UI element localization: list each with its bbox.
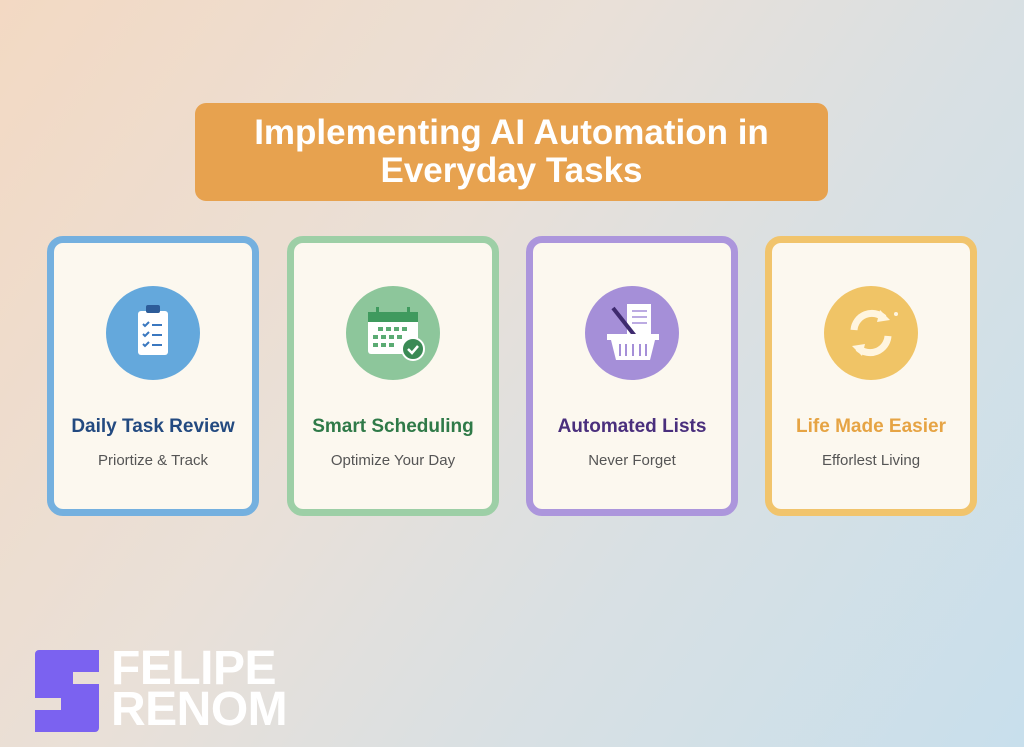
card: daily task review bbox=[47, 236, 259, 516]
icon: calendar bbox=[346, 286, 440, 380]
title bbox=[195, 103, 828, 201]
subtitle: Efforlest Living bbox=[822, 452, 920, 469]
title: Everyday Tasks bbox=[380, 151, 643, 190]
card: life made easier bbox=[765, 236, 977, 516]
icon: refresh bbox=[824, 286, 918, 380]
logo text: RENOM bbox=[111, 683, 287, 736]
heading: Daily Task Review bbox=[71, 416, 235, 437]
card: automated lists bbox=[526, 236, 738, 516]
logo text bbox=[111, 642, 287, 736]
title: Implementing AI Automation in bbox=[254, 113, 769, 152]
subtitle: Optimize Your Day bbox=[331, 452, 455, 469]
card: smart scheduling bbox=[287, 236, 499, 516]
subtitle: Never Forget bbox=[588, 452, 676, 469]
subtitle: Priortize & Track bbox=[98, 452, 208, 469]
heading: Life Made Easier bbox=[796, 416, 946, 437]
logo bbox=[35, 642, 287, 736]
heading: Smart Scheduling bbox=[312, 416, 474, 437]
icon: basket bbox=[585, 286, 679, 380]
icon: logo mark bbox=[35, 650, 99, 732]
icon: clipboard bbox=[106, 286, 200, 380]
heading: Automated Lists bbox=[558, 416, 706, 437]
logo text: FELIPE bbox=[111, 642, 276, 695]
